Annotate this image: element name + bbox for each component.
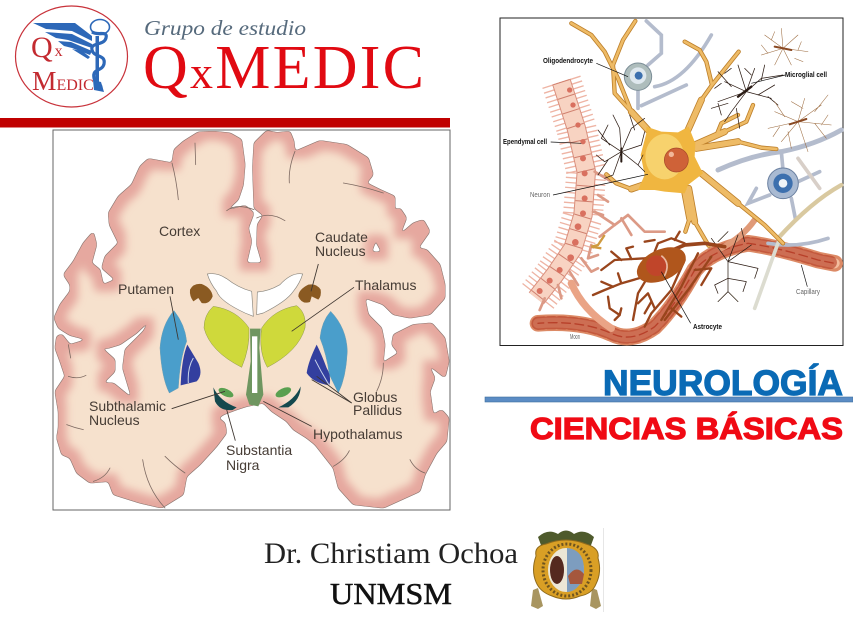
institution: UNMSM: UNMSM xyxy=(330,576,452,611)
ependymal cells xyxy=(536,82,586,298)
brain labels: Subthalamic xyxy=(89,398,166,414)
ventricles xyxy=(207,274,303,316)
blue divider xyxy=(485,397,853,402)
astrocyte xyxy=(593,232,725,327)
neural cell labels: Moon xyxy=(570,334,580,341)
illustration: neuron and glia xyxy=(536,21,841,337)
third ventricle and hypothalamus xyxy=(246,329,263,406)
neural cell labels: Microglial cell xyxy=(785,72,827,79)
capillary xyxy=(538,220,835,337)
seal tassels xyxy=(531,588,601,609)
logo: QxMedic emblem xyxy=(16,6,128,107)
neural cell labels: Ependymal cell xyxy=(503,139,547,146)
neuron nucleus xyxy=(664,148,688,172)
heading: NEUROLOGÍA: NEUROLOGÍA xyxy=(603,363,843,403)
brain labels: Thalamus xyxy=(355,277,416,293)
brain labels: Nucleus xyxy=(89,412,140,428)
icon: university seal xyxy=(531,528,604,612)
ependymal processes xyxy=(540,172,665,310)
brain labels: Nucleus xyxy=(315,243,366,259)
seal crest xyxy=(538,530,594,548)
heading: Grupo de estudio: Grupo de estudio xyxy=(144,16,306,40)
neural cell labels: Neuron xyxy=(530,192,550,199)
leader lines xyxy=(170,264,354,441)
globus pallidus xyxy=(181,345,330,385)
microglial cells xyxy=(596,28,831,302)
brain labels: Pallidus xyxy=(353,402,402,418)
neural cell labels xyxy=(503,58,827,341)
neural cell labels: Astrocyte xyxy=(693,324,722,331)
heading: QxMEDIC: QxMEDIC xyxy=(143,34,424,102)
oligodendrocyte 2 xyxy=(768,168,798,199)
thalamus xyxy=(204,306,305,367)
neuron dendrites xyxy=(571,21,783,246)
neural cell labels: Capillary xyxy=(796,289,820,296)
sulci lines xyxy=(67,143,425,508)
icon: caduceus wings and serpent xyxy=(33,20,110,92)
brain labels: Globus xyxy=(353,389,397,405)
heading: CIENCIAS BÁSICAS: CIENCIAS BÁSICAS xyxy=(530,411,843,446)
putamen xyxy=(160,311,347,393)
panel: neural cells illustration xyxy=(500,18,843,346)
brain labels: Putamen xyxy=(118,281,174,297)
brain labels: Nigra xyxy=(226,457,260,473)
panel: brain coronal section xyxy=(53,130,450,510)
brain labels: Cortex xyxy=(159,223,200,239)
substantia nigra xyxy=(213,386,301,410)
logo text: Qx Medic: x xyxy=(55,43,63,60)
subthalamic nucleus xyxy=(217,385,293,399)
brain labels: Hypothalamus xyxy=(313,426,402,442)
neural cell labels: Oligodendrocyte xyxy=(543,58,593,65)
neuron body xyxy=(638,127,703,193)
caudate nucleus xyxy=(190,284,321,303)
leader lines xyxy=(551,63,807,323)
logo text: Qx Medic: EDIC xyxy=(56,77,94,94)
seal shield xyxy=(567,548,584,592)
brain labels: Substantia xyxy=(226,442,292,458)
illustration: brain anatomy xyxy=(54,131,449,508)
logo text: Qx Medic: M xyxy=(32,65,56,96)
oligodendrocyte processes xyxy=(638,21,841,308)
logo text: Qx Medic: Q xyxy=(31,31,53,64)
brain labels xyxy=(89,223,416,473)
oligodendrocyte 1 xyxy=(624,63,652,90)
red divider bar xyxy=(0,118,450,128)
brain labels: Caudate xyxy=(315,229,368,245)
astrocyte nucleus xyxy=(646,255,667,276)
author name: Dr. Christiam Ochoa xyxy=(264,537,518,570)
